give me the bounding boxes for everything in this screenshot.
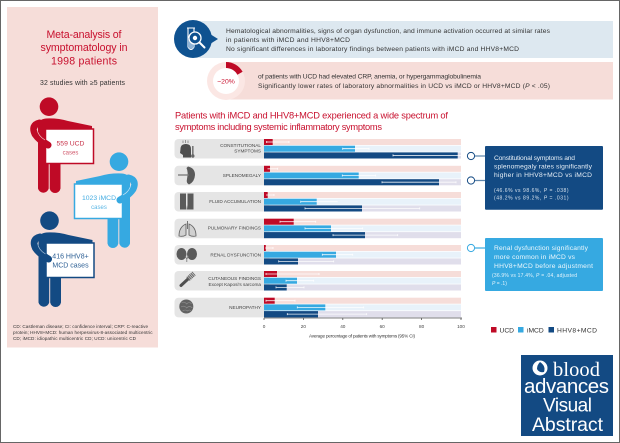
callout: renal dysfunction: Renal dysfunction significantly xyxy=(494,245,589,252)
figure: UCD cases: cases xyxy=(63,150,78,156)
heading: meta-analysis: 1998 patients xyxy=(51,56,117,68)
chart axis: percent of patients: 40 xyxy=(340,324,346,329)
row: cutaneous findings: Except Kaposi's sarcoma xyxy=(209,282,261,287)
row: renal dysfunction: RENAL DYSFUNCTION xyxy=(210,252,261,258)
logo: Blood Advances Visual Abstract: blood xyxy=(553,359,600,381)
legend xyxy=(491,327,597,334)
row: renal dysfunction xyxy=(174,245,461,264)
callout: renal dysfunction: more common in iMCD vs xyxy=(494,254,576,261)
chart axis: percent of patients: 100 xyxy=(457,324,465,329)
logo: Blood Advances Visual Abstract xyxy=(521,355,613,436)
row: splenomegaly: SPLENOMEGALY xyxy=(223,173,262,178)
row: fluid accumulation: FLUID ACCUMULATION xyxy=(209,199,261,204)
row: constitutional symptoms: CONSTITUTIONAL xyxy=(220,143,261,148)
figure: UCD cases xyxy=(34,97,94,193)
panel: laboratory findings iMCD and HHV8+MCD: No significant differences in laboratory findings between patients with iMCD and HHV8+MCD xyxy=(226,46,519,53)
row: constitutional symptoms: SYMPTOMS xyxy=(234,148,261,154)
logo: Blood Advances Visual Abstract: advances xyxy=(524,375,609,398)
heading: meta-analysis: Meta-analysis of xyxy=(46,29,122,41)
icon: lungs xyxy=(179,221,196,236)
chart axis: percent of patients: 20 xyxy=(301,324,306,329)
panel: laboratory findings UCD: of patients with UCD had elevated CRP, anemia, or hypergammaglobulinemia xyxy=(258,74,481,80)
row: splenomegaly xyxy=(174,166,461,185)
callout: renal dysfunction: P = .1) xyxy=(492,281,507,287)
panel: study overview xyxy=(7,7,158,348)
icon: test tube and magnifier xyxy=(174,20,218,58)
row: pulmonary findings: PULMONARY FINDINGS xyxy=(208,226,261,230)
figure: HHV8+MCD cases: MCD cases xyxy=(52,262,89,270)
callout: constitutional symptoms and splenomegaly xyxy=(467,146,603,210)
icon: swollen legs xyxy=(180,194,194,210)
callout: constitutional symptoms and splenomegaly: Constitutional symptoms and xyxy=(494,155,575,162)
legend: HHV8+MCD xyxy=(557,328,597,334)
callout: constitutional symptoms and splenomegaly: (46.6% vs 98.6%, P = .038) xyxy=(494,188,569,194)
row: pulmonary findings xyxy=(174,219,461,238)
panel: laboratory findings UCD xyxy=(226,62,613,100)
chart: ~20% donut: ~20% xyxy=(217,78,235,86)
row: constitutional symptoms xyxy=(174,139,461,158)
panel: laboratory findings iMCD and HHV8+MCD: in patients with iMCD and HHV8+MCD xyxy=(226,37,350,44)
legend: UCD xyxy=(500,328,514,334)
callout: constitutional symptoms and splenomegaly: splenomegaly rates significantly xyxy=(494,164,593,170)
icon: spleen xyxy=(178,166,195,184)
panel: laboratory findings iMCD and HHV8+MCD xyxy=(190,21,613,58)
figure: UCD cases: 559 UCD xyxy=(57,140,85,148)
chart axis: percent of patients: 0 xyxy=(263,324,266,329)
row: fluid accumulation xyxy=(174,192,461,212)
row: cutaneous findings xyxy=(174,271,461,290)
figure: iMCD cases: cases xyxy=(91,205,107,211)
logo: Blood Advances Visual Abstract: Abstract xyxy=(532,414,604,436)
callout: renal dysfunction xyxy=(467,238,603,291)
callout: renal dysfunction: HHV8+MCD before adjustment xyxy=(494,263,593,270)
panel: laboratory findings UCD: Significantly lower rates of laboratory abnormalities in UCD vs iMCD or HHV8+MCD (P < .05) xyxy=(258,83,550,90)
icon: kidneys xyxy=(176,248,197,262)
row: neuropathy: NEUROPATHY xyxy=(229,305,262,310)
heading: symptom spectrum xyxy=(175,110,448,132)
chart: ~20% donut xyxy=(207,62,245,100)
footnote: abbreviations xyxy=(13,324,153,341)
text: number of studies: 32 studies with ≥5 patients xyxy=(40,80,126,87)
panel: laboratory findings iMCD and HHV8+MCD: Hematological abnormalities, signs of organ dysfunction, and immune activation occurred at similar rates xyxy=(226,28,551,35)
heading: meta-analysis xyxy=(40,29,128,68)
logo: Blood Advances Visual Abstract: Visual xyxy=(543,396,592,416)
figure: HHV8+MCD cases xyxy=(34,211,94,307)
icon: brain xyxy=(179,300,193,314)
callout: constitutional symptoms and splenomegaly: higher in HHV8+MCD vs iMCD xyxy=(494,172,592,179)
icon: head with thermometer xyxy=(180,140,194,158)
chart axis: percent of patients: Average percentage of patients with symptoms (95% CI) xyxy=(309,334,415,338)
footnote: abbreviations: protein; HHV8+MCD: human herpesvirus-8-associated multicentric xyxy=(13,330,153,335)
row: neuropathy xyxy=(174,298,461,317)
figure: iMCD cases xyxy=(74,152,134,248)
figure: HHV8+MCD cases: 416 HHV8+ xyxy=(52,254,89,260)
heading: symptom spectrum: symptoms including systemic inflammatory symptoms xyxy=(175,122,382,132)
chart axis: percent of patients: 80 xyxy=(419,324,425,329)
callout: renal dysfunction: (36.9% vs 17.4%, P = .04, adjusted xyxy=(492,273,577,279)
callout: constitutional symptoms and splenomegaly: (48.2% vs 89.2%, P = .031) xyxy=(494,196,569,202)
icon: skin lesion arm xyxy=(181,274,194,286)
footnote: abbreviations: CD; iMCD: idiopathic multicentric CD; UCD: unicentric CD xyxy=(13,336,137,341)
heading: symptom spectrum: Patients with iMCD and HHV8+MCD experienced a wide spectrum of xyxy=(175,110,448,120)
bar chart: symptoms by Castleman subtype xyxy=(174,139,465,338)
figure: iMCD cases: 1023 iMCD xyxy=(82,195,116,202)
footnote: abbreviations: CD: Castleman disease; CI: confidence interval; CRP: C-reactive xyxy=(13,324,148,329)
heading: meta-analysis: symptomatology in xyxy=(40,42,128,54)
chart axis: percent of patients: 60 xyxy=(380,324,385,329)
row: cutaneous findings: CUTANEOUS FINDINGS xyxy=(208,276,261,281)
legend: iMCD xyxy=(527,328,544,334)
chart axis: percent of patients xyxy=(263,318,465,338)
